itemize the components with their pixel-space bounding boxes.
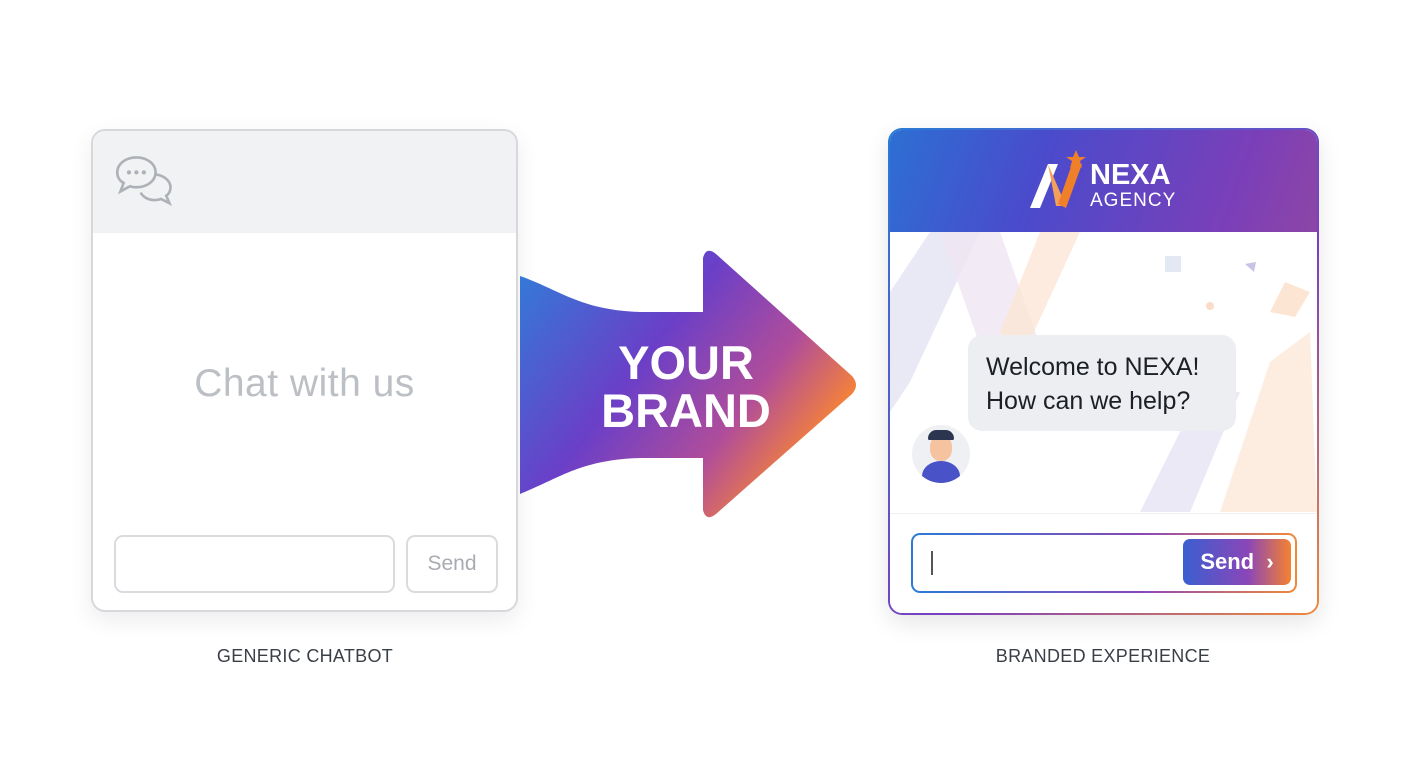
caption: branded: BRANDED EXPERIENCE [996,646,1210,666]
generic send button: Send [427,552,477,575]
send button: Send › [1200,549,1274,574]
input bar [890,513,1317,614]
panel: branded chatbot [888,128,1319,615]
speech bubble [968,335,1236,431]
caption: generic: GENERIC CHATBOT [217,646,393,666]
branded header [890,130,1317,232]
placeholder text: Chat with us [194,362,415,405]
background decoration [890,232,1317,512]
branded header: AGENCY [1090,190,1176,211]
speech bubble: How can we help? [986,387,1190,415]
branded header: NEXA [1090,159,1171,191]
icon: chat bubbles [116,156,172,206]
generic send button [406,535,498,593]
arrow: your brand: BRAND [601,384,771,437]
arrow: your brand [520,250,856,518]
speech bubble: Welcome to NEXA! [986,353,1200,381]
generic header [93,131,516,233]
arrow: your brand: YOUR [618,336,754,389]
send button [1183,539,1291,585]
panel: generic chatbot [91,129,518,612]
avatar [912,425,970,483]
logo [1030,150,1086,208]
generic input [114,535,395,593]
